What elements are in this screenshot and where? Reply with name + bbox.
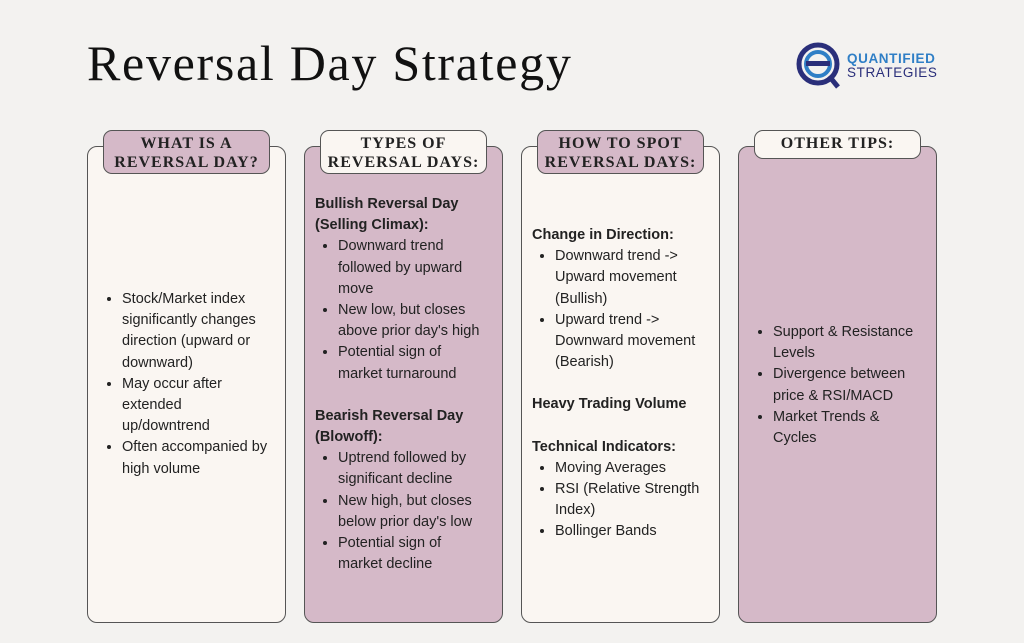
text: other tips: price & RSI/MACD bbox=[773, 388, 893, 404]
text: how to spot: Moving Averages bbox=[555, 460, 666, 476]
text: types: Bullish Reversal Day bbox=[315, 196, 458, 212]
text: what is: Stock/Market index bbox=[122, 291, 245, 307]
text: how to spot: Bollinger Bands bbox=[555, 523, 657, 539]
text: other tips bbox=[758, 324, 913, 446]
text: other tips: Cycles bbox=[773, 430, 817, 446]
heading: how to spot bbox=[537, 130, 704, 174]
heading: other tips bbox=[754, 130, 921, 159]
heading: how to spot: HOW TO SPOT bbox=[559, 135, 682, 152]
text: what is: May occur after bbox=[122, 376, 222, 392]
panel: what is a reversal day bbox=[87, 146, 286, 623]
heading: other tips: OTHER TIPS: bbox=[781, 135, 894, 152]
text: how to spot bbox=[532, 227, 699, 539]
text: what is bbox=[107, 291, 268, 477]
text: types: (Selling Climax): Bearish Reversal Day bbox=[315, 217, 463, 424]
panel: how to spot reversal days bbox=[521, 146, 720, 623]
text: what is: significantly changes bbox=[122, 312, 256, 328]
text: types: New high, but closes bbox=[338, 493, 472, 509]
text: types: (Blowoff): bbox=[315, 429, 383, 445]
text: what is: downward) bbox=[122, 355, 193, 371]
text: types: Downward trend bbox=[338, 238, 444, 254]
text: how to spot: (Bullish) bbox=[555, 291, 607, 307]
text: other tips: Market Trends & bbox=[773, 409, 879, 425]
text: other tips: Divergence between bbox=[773, 366, 905, 382]
text: what is: up/downtrend bbox=[122, 418, 210, 434]
logo: STRATEGIES bbox=[847, 65, 938, 80]
panel: other tips bbox=[738, 146, 937, 623]
text: how to spot: (Bearish) bbox=[555, 354, 614, 370]
text: how to spot: Upward trend -> bbox=[555, 312, 659, 328]
heading: what is a reversal day: WHAT IS A bbox=[140, 135, 232, 152]
text: types: below prior day's low bbox=[338, 514, 472, 530]
text: types bbox=[315, 196, 479, 572]
panel: types of reversal days bbox=[304, 146, 503, 623]
text: other tips: Support & Resistance bbox=[773, 324, 913, 340]
text: types: market turnaround bbox=[338, 366, 456, 382]
title: Reversal Day Strategy bbox=[87, 35, 573, 91]
text: types: move bbox=[338, 281, 373, 297]
text: how to spot: Downward trend -> bbox=[555, 248, 678, 264]
text: what is: Often accompanied by bbox=[122, 439, 267, 455]
text: how to spot: Downward movement bbox=[555, 333, 695, 349]
heading: what is a reversal day bbox=[103, 130, 270, 174]
text: how to spot: RSI (Relative Strength bbox=[555, 481, 699, 497]
logo bbox=[796, 42, 938, 89]
text: types: Potential sign of bbox=[338, 344, 441, 360]
text: types: followed by upward bbox=[338, 260, 462, 276]
logo: QUANTIFIED bbox=[847, 51, 936, 66]
heading: types: REVERSAL DAYS: bbox=[328, 154, 479, 171]
text: what is: direction (upward or bbox=[122, 333, 250, 349]
text: other tips: Levels bbox=[773, 345, 815, 361]
text: types: above prior day's high bbox=[338, 323, 479, 339]
text: what is: high volume bbox=[122, 461, 200, 477]
heading: how to spot: REVERSAL DAYS: bbox=[545, 154, 696, 171]
heading: types: TYPES OF bbox=[361, 135, 446, 152]
text: types: Potential sign of bbox=[338, 535, 441, 551]
text: what is: extended bbox=[122, 397, 182, 413]
text: how to spot: Change in Direction: Heavy Trading Volume Technical Indicators: bbox=[532, 227, 686, 455]
text: types: significant decline bbox=[338, 471, 452, 487]
text: types: market decline bbox=[338, 556, 432, 572]
text: types: New low, but closes bbox=[338, 302, 465, 318]
text: how to spot: Index) bbox=[555, 502, 595, 518]
heading: what is a reversal day: REVERSAL DAY? bbox=[114, 154, 259, 171]
heading: types bbox=[320, 130, 487, 174]
text: how to spot: Upward movement bbox=[555, 269, 677, 285]
text: types: Uptrend followed by bbox=[338, 450, 466, 466]
